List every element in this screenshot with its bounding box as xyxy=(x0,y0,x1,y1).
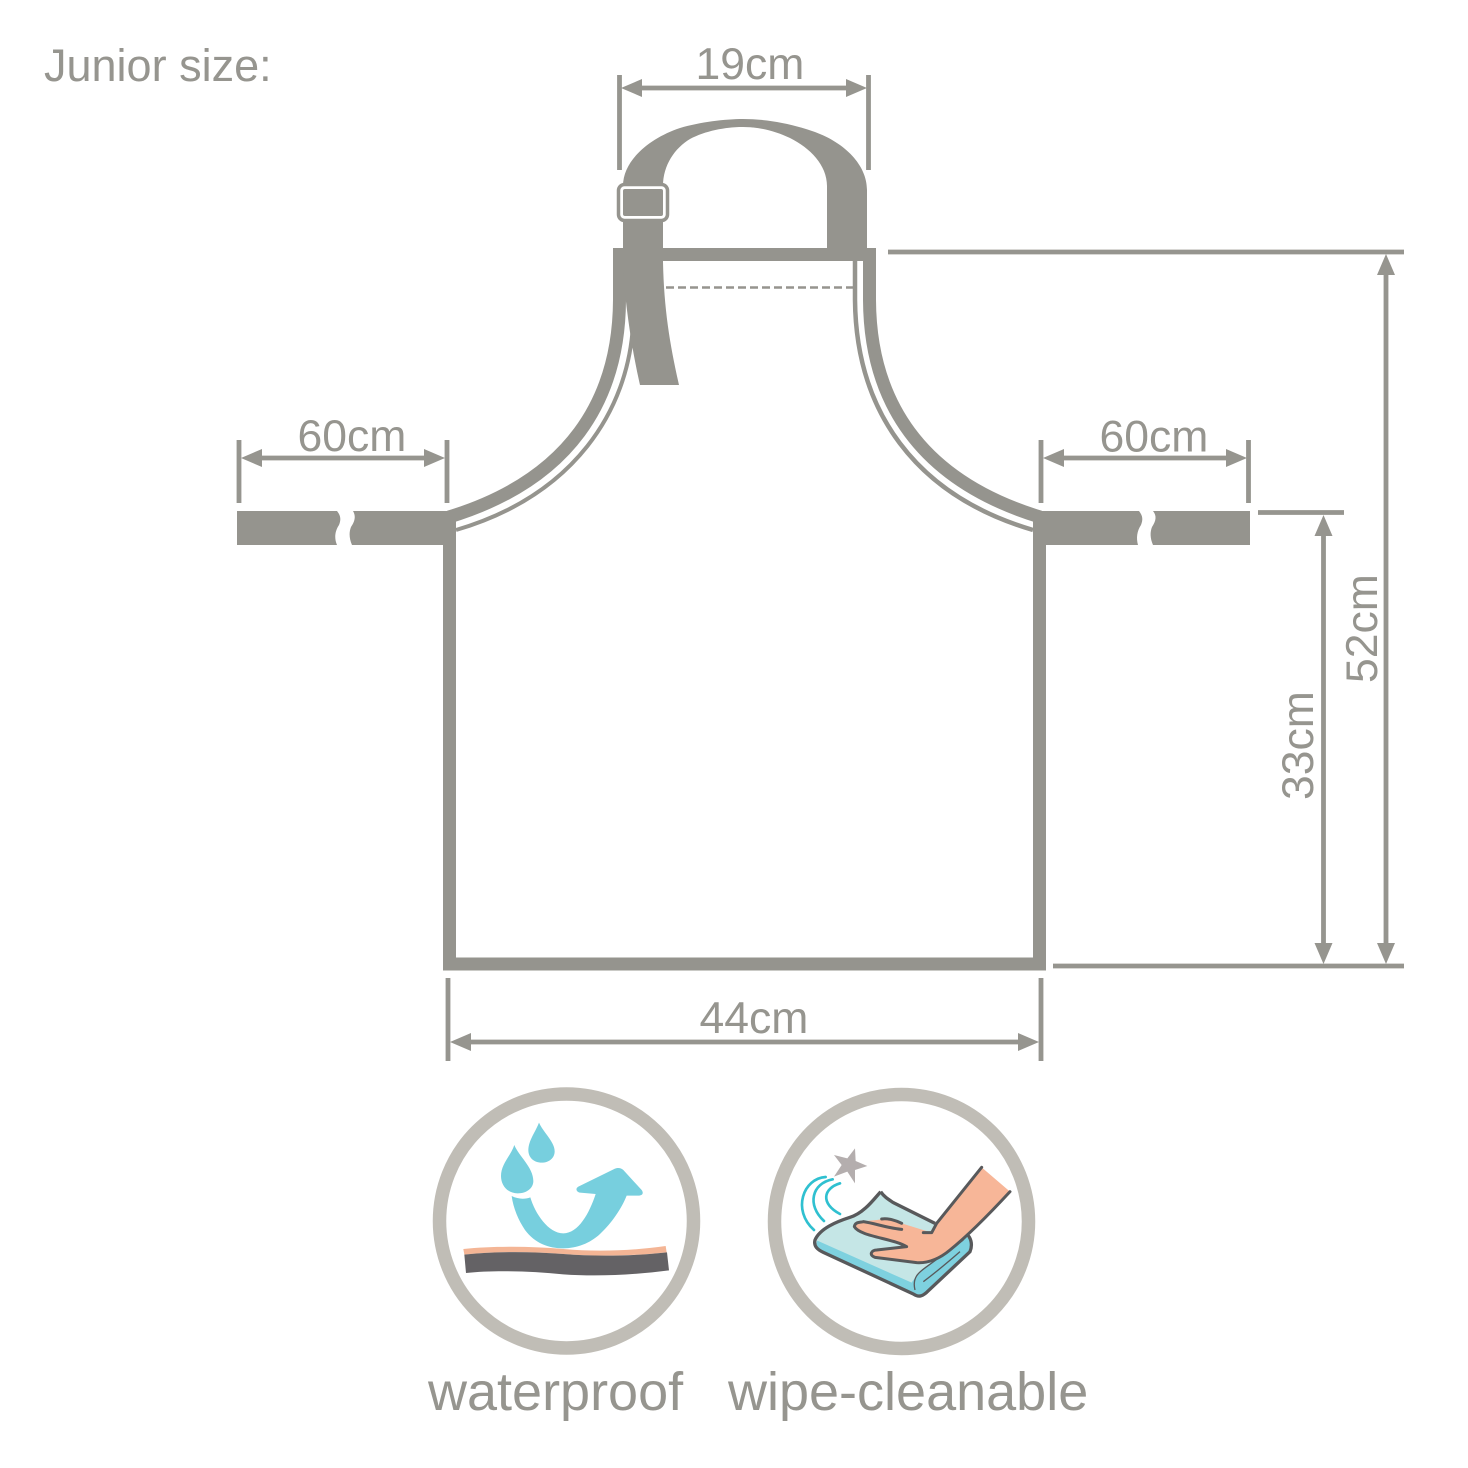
neck binding bar xyxy=(613,248,876,261)
water and fabric artwork xyxy=(463,1123,669,1275)
label: waterproof: waterproof xyxy=(427,1362,684,1422)
icon ring xyxy=(440,1094,694,1348)
icon: wipe-cleanable xyxy=(774,1094,1028,1348)
label: wipe-cleanable: wipe-cleanable xyxy=(727,1362,1088,1422)
dimension: left tie 60cm xyxy=(239,412,447,503)
apron diagram xyxy=(237,119,1250,964)
hand and cloth artwork xyxy=(802,1148,1010,1296)
right armhole binding xyxy=(870,248,1040,517)
icon ring xyxy=(774,1094,1028,1348)
dimension: bottom width 44cm: 44cm xyxy=(700,994,808,1043)
left inner stitching line xyxy=(456,325,633,530)
apron body outline xyxy=(450,511,1040,964)
title: Junior size: Junior size: xyxy=(44,40,272,91)
icon: waterproof xyxy=(440,1094,694,1348)
left armhole binding xyxy=(449,248,620,517)
dimension: bottom width 44cm xyxy=(448,978,1041,1061)
neck strap xyxy=(623,119,867,248)
dimension: body height 33cm: 33cm xyxy=(1274,691,1323,800)
dashed stitching xyxy=(666,286,853,289)
left waist tie xyxy=(237,511,449,545)
dimension: right tie 60cm xyxy=(1041,412,1248,503)
hanging strap end xyxy=(623,248,679,385)
dimension: neck width 19cm xyxy=(620,40,868,170)
dimension: total height 52cm xyxy=(888,252,1404,964)
dimension: right tie 60cm: 60cm xyxy=(1100,412,1208,462)
dimension: left tie 60cm: 60cm xyxy=(298,412,406,461)
dimension: body height 33cm xyxy=(1053,512,1404,966)
buckle xyxy=(618,184,668,220)
dimension: neck width 19cm: 19cm xyxy=(696,40,804,89)
right inner stitching line xyxy=(855,261,1033,530)
dimension: total height 52cm: 52cm xyxy=(1338,574,1387,683)
right waist tie xyxy=(1040,511,1250,545)
